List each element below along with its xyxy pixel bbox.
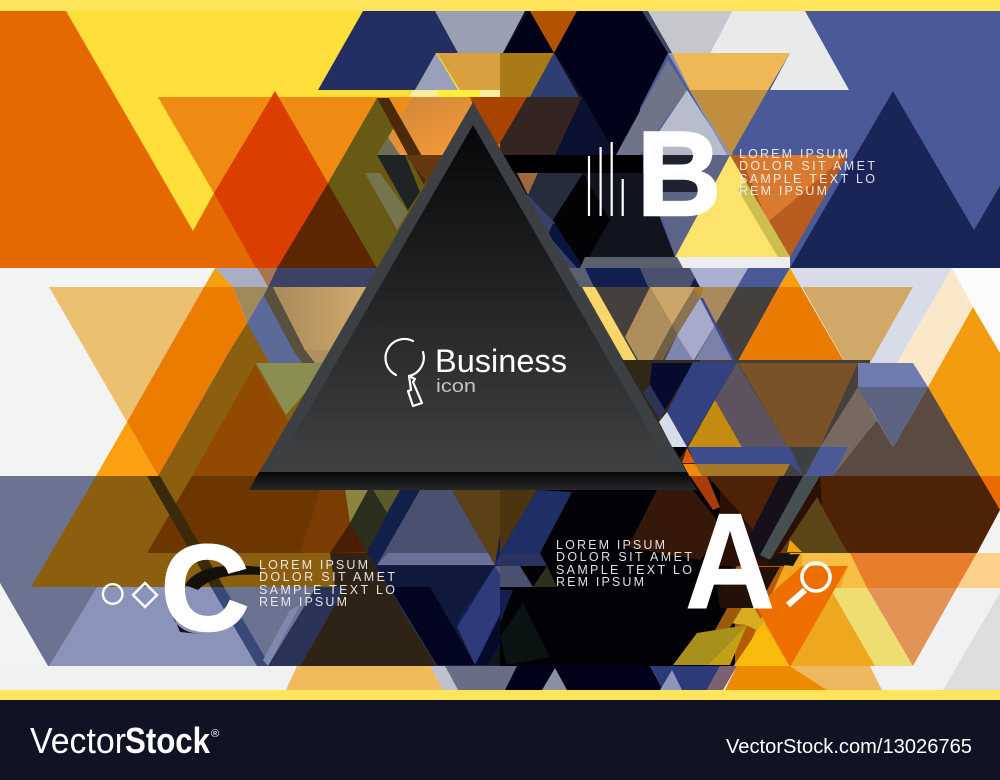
- letter shadow C: [172, 565, 260, 634]
- yellow top stripe: [0, 0, 1000, 11]
- central dark triangle: [249, 102, 697, 490]
- text block A: SAMPLE TEXT LO: [556, 563, 692, 577]
- text block C: LOREM IPSUM: [259, 558, 368, 572]
- letter shadow A: [717, 567, 780, 608]
- heading: Business: Business: [435, 343, 567, 379]
- central title block: [385, 339, 567, 406]
- footer bar: Stock: [125, 720, 211, 761]
- icon: bars: [589, 142, 623, 216]
- letter shadow B: [655, 138, 700, 206]
- background: lower band: [0, 476, 1000, 667]
- text block C: SAMPLE TEXT LO: [259, 583, 395, 597]
- text block B: SAMPLE TEXT LO: [739, 172, 875, 186]
- text block B: LOREM IPSUM: [739, 147, 848, 161]
- section A: [556, 485, 830, 637]
- text block B: [739, 147, 875, 198]
- subheading: icon: icon: [436, 376, 476, 396]
- background: middle band: [0, 265, 1000, 490]
- icon: key-shaped bulb: [385, 339, 424, 406]
- letter C: C: [161, 520, 249, 656]
- text block A: REM IPSUM: [556, 575, 644, 589]
- footer url: VectorStock.com/13026765: [726, 736, 972, 758]
- text block C: REM IPSUM: [259, 595, 347, 609]
- background: top band: [0, 11, 1000, 268]
- footer logo: Vector: [30, 720, 126, 761]
- text block A: LOREM IPSUM: [556, 538, 665, 552]
- text block C: [259, 558, 395, 609]
- background: strip below the bands: [0, 588, 1000, 690]
- letter B: B: [637, 107, 721, 241]
- icon: circle: [103, 584, 122, 604]
- section B: [589, 107, 875, 241]
- footer bar: ®: [211, 728, 219, 740]
- text block C: DOLOR SIT AMET: [259, 570, 395, 584]
- text block B: DOLOR SIT AMET: [739, 159, 875, 173]
- footer bar: [0, 700, 1000, 780]
- text block A: DOLOR SIT AMET: [556, 550, 692, 564]
- letter A: A: [685, 485, 775, 637]
- icon: magnifier: [788, 563, 830, 605]
- text block A: [556, 538, 692, 589]
- icon: diamond: [133, 583, 157, 607]
- text block B: REM IPSUM: [739, 184, 827, 198]
- yellow bottom stripe: [0, 690, 1000, 700]
- section C: [103, 520, 395, 656]
